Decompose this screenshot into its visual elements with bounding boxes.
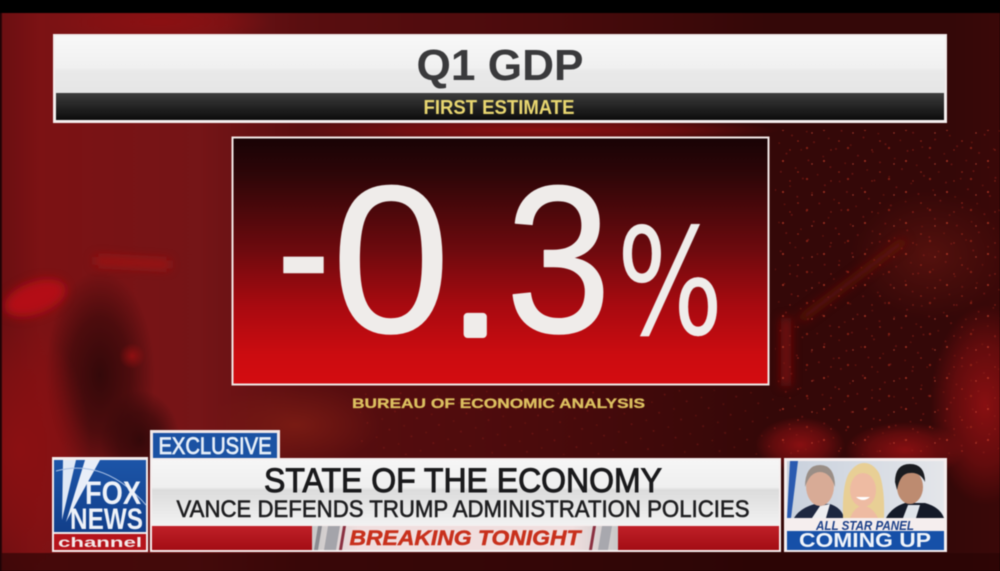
figure: -0.3: - [276, 138, 330, 361]
heading: Q1 GDP: Q1 GDP [416, 41, 584, 90]
figure: -0.3: . [453, 189, 497, 368]
strip: breaking tonight [152, 526, 779, 550]
logo: Fox News Channel [52, 457, 148, 552]
strip: breaking tonight: BREAKING TONIGHT [350, 527, 583, 550]
caption: all star panel: ALL STAR PANEL [815, 519, 914, 533]
logo: Fox News Channel: channel [58, 534, 142, 550]
photo: man right [886, 464, 944, 518]
panel: main figure [232, 138, 768, 384]
photo: man left [794, 465, 844, 518]
panel: all star panel promo [784, 458, 947, 552]
figure: -0.3: 0 [332, 142, 450, 377]
figure: -0.3 [276, 138, 611, 377]
panel: headline lower third [150, 458, 781, 552]
photo: woman centre [843, 463, 884, 518]
subtitle strip [56, 93, 944, 120]
panel: title bar [53, 34, 947, 123]
subheading: first estimate: FIRST ESTIMATE [424, 97, 574, 119]
subheadline: VANCE DEFENDS TRUMP ADMINISTRATION POLICIES [176, 496, 750, 523]
source label: BUREAU OF ECONOMIC ANALYSIS [352, 395, 645, 411]
banner: coming up: COMING UP [799, 530, 931, 552]
figure: -0.3: 3 [506, 142, 611, 377]
figure: percent sign: % [617, 197, 723, 369]
headline: STATE OF THE ECONOMY [264, 462, 662, 500]
top letterbox [0, 0, 1000, 13]
icon: searchlight beams [56, 460, 146, 522]
badge: exclusive: EXCLUSIVE [158, 433, 272, 460]
logo: Fox News Channel: FOX [85, 475, 142, 511]
logo: Fox News Channel: NEWS [70, 503, 143, 536]
